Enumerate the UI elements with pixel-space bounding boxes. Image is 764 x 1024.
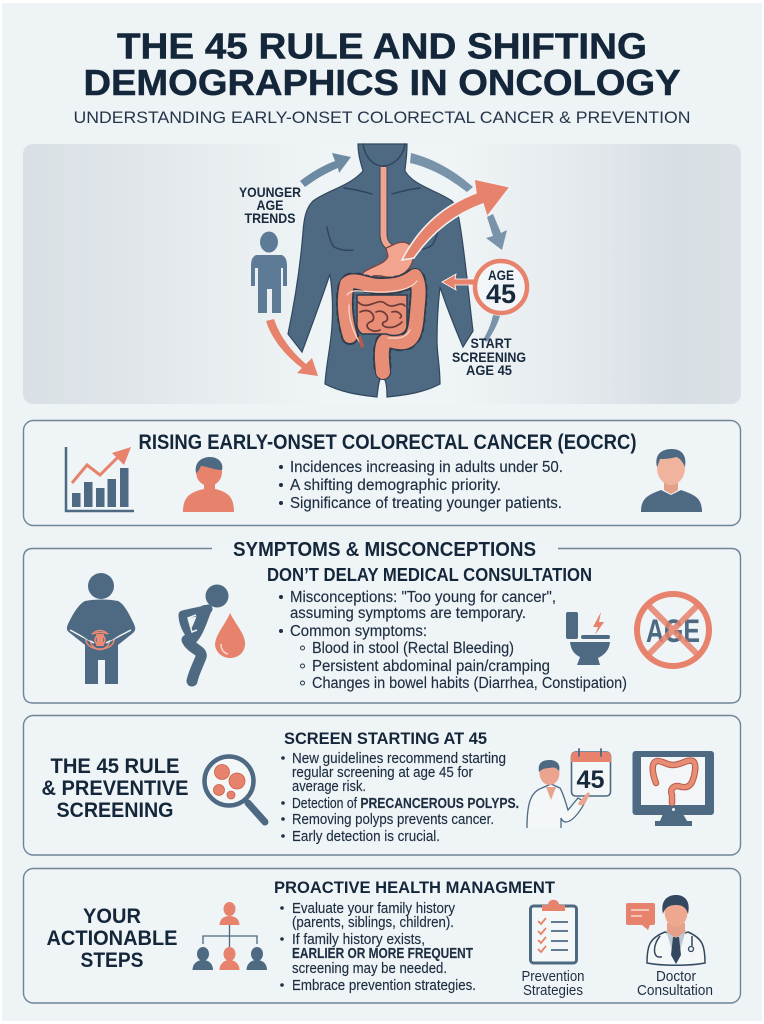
label: younger age trends: TRENDS [244,210,296,226]
arrow: coral pointing to body [442,274,478,290]
arrow: growth arrow up right [402,179,510,260]
section title: STEPS [80,949,144,972]
bullet list: Evaluate your family history [292,901,456,917]
panel: hero anatomy illustration [23,144,741,404]
bullet list: Removing polyps prevents cancer. [292,812,494,828]
label: start screening [452,335,526,378]
section title: THE 45 RULE [50,755,180,778]
icon: abdominal pain person [67,573,135,684]
icon: monitor with colon [632,751,714,826]
badge: age 45: AGE [488,267,514,283]
title [84,26,680,103]
label: younger age trends [239,184,301,226]
bullet list: Early detection is crucial. [292,829,440,845]
bullet list: Significance of treating younger patients. [290,495,562,512]
section title: ACTIONABLE [46,927,178,950]
small intestine [357,295,407,335]
title: DEMOGRAPHICS IN ONCOLOGY [84,62,680,103]
section title: YOUR [83,905,141,928]
bullet list [281,751,519,845]
icon: clipboard checklist [530,900,576,963]
panel: the 45 rule [24,716,740,855]
heading: RISING EARLY-ONSET COLORECTAL CANCER (EOCRC) [138,431,636,454]
badge: age 45: 45 [486,279,516,309]
bullet list: Persistent abdominal pain/cramping [312,658,550,675]
icon: doctor with calendar: 45 [576,766,605,794]
bullet list: A shifting demographic priority. [290,477,501,494]
large intestine [345,276,419,372]
subheading: SCREEN STARTING AT 45 [284,729,487,748]
icon: small person [251,232,287,313]
section title: & PREVENTIVE [42,777,188,800]
bullet list: Blood in stool (Rectal Bleeding) [312,640,514,657]
label: start screening: AGE 45 [466,362,512,378]
section title [46,905,178,972]
bullet list: Detection of PRECANCEROUS POLYPS. [292,796,519,812]
icon: family tree [192,902,267,970]
bullet list: screening may be needed. [292,961,447,977]
bullet list: Common symptoms: [290,623,427,640]
bullet list: Embrace prevention strategies. [292,978,476,994]
label: younger age trends: AGE [256,197,284,213]
arrow: coral bottom left [266,319,318,376]
subtitle: UNDERSTANDING EARLY-ONSET COLORECTAL CANCER & PREVENTION [74,108,690,127]
bullet list: Misconceptions: "Too young for cancer", [290,589,556,606]
label: start screening: START [470,335,512,351]
label: prevention strategies: Prevention [522,968,584,985]
icon: doctor with speech bubble [626,895,705,965]
bullet list: If family history exists, [292,932,425,948]
icon: no age sign: AGE [646,613,700,649]
bullet list: Incidences increasing in adults under 50. [290,459,563,476]
bullet list: average risk. [292,779,366,795]
section title: SCREENING [56,799,174,822]
bullet list: regular screening at age 45 for [292,765,473,781]
section title [42,755,188,822]
icon: young adult [641,449,702,512]
label: younger age trends: YOUNGER [239,184,301,200]
bullet list [279,589,627,692]
heading: SYMPTOMS & MISCONCEPTIONS [233,539,536,561]
arrow: blue right down [486,214,507,250]
subheading: DON’T DELAY MEDICAL CONSULTATION [267,565,592,585]
bullet list: EARLIER OR MORE FREQUENT [292,946,473,962]
esophagus [384,167,395,250]
icon: doctor with calendar [527,749,611,828]
subheading: PROACTIVE HEALTH MANAGMENT [274,878,556,897]
icon: toilet with lightning [566,612,610,665]
label: start screening: SCREENING [452,349,526,365]
label: prevention strategies [522,968,584,999]
bullet list: New guidelines recommend starting [292,751,506,767]
bullet list: assuming symptoms are temporary. [290,605,526,622]
label: doctor consultation: Doctor [656,968,696,985]
panel: rising EOCRC [24,420,740,526]
panel: your actionable steps [24,868,740,1003]
panel: symptoms and misconceptions [24,539,740,703]
icon: no age sign [637,594,709,666]
label: prevention strategies: Strategies [523,982,583,999]
badge: age 45 [475,261,527,313]
arrow: blue lower arc [483,315,500,342]
stomach [361,242,414,287]
body silhouette [288,144,473,397]
label: doctor consultation [637,968,713,999]
bullet list: Changes in bowel habits (Diarrhea, Constipation) [312,675,627,692]
icon: magnifier with polyps [204,756,265,822]
title: THE 45 RULE AND SHIFTING [117,26,647,66]
label: doctor consultation: Consultation [637,982,713,999]
bullet list [280,901,476,994]
icon: rising chart [66,447,134,511]
icon: young patient coral [183,457,234,512]
bullet list: (parents, siblings, children). [292,915,454,931]
bullet list [279,459,563,512]
arrow: blue top right arc [410,153,473,192]
arrow: blue top left [300,153,351,187]
icon: bent person with blood drop [183,584,245,681]
